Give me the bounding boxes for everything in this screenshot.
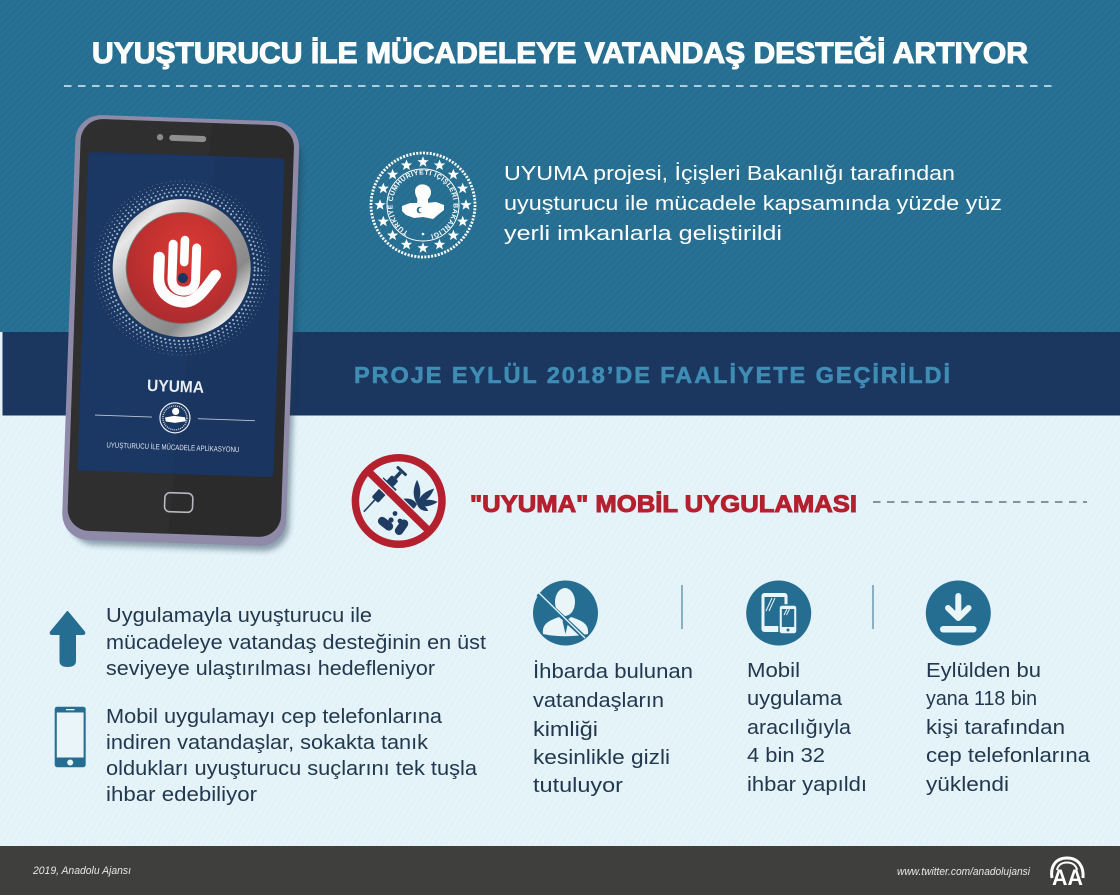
text: downloads: yana 118 bin [926, 688, 1037, 710]
icon: ministry seal: TÜRKİYE CUMHURİYETİ İÇİŞLERİ BAKANLIĞI [388, 170, 459, 239]
intro text: uyuşturucu ile mücadele kapsamında yüzde yüz [504, 192, 1002, 215]
text: identity kept secret: İhbarda bulunan [533, 660, 693, 683]
text: reporting: oldukları uyuşturucu suçlarını tek tuşla [106, 758, 478, 780]
text: downloads: yüklendi [926, 774, 1009, 796]
text: downloads: cep telefonlarına [926, 745, 1091, 767]
band: project date [2, 332, 1120, 416]
footer [0, 846, 1120, 895]
footer credit: 2019, Anadolu Ajansı [32, 865, 131, 877]
text: number of reports: uygulama [747, 688, 843, 710]
footer url: www.twitter.com/anadolujansi [897, 866, 1031, 878]
icon: download [926, 580, 991, 646]
text: reporting: Mobil uygulamayı cep telefonlarına [106, 706, 443, 728]
icon: no drugs sign [355, 458, 442, 544]
text: downloads: kişi tarafından [926, 717, 1065, 739]
text: reporting: indiren vatandaşlar, sokakta tanık [106, 732, 429, 754]
intro text: yerli imkanlarla geliştirildi [504, 222, 782, 245]
text: number of reports: 4 bin 32 [747, 745, 825, 767]
icon: ministry seal [370, 152, 476, 258]
text: number of reports [747, 660, 867, 796]
text: downloads: Eylülden bu [926, 660, 1041, 682]
text: identity kept secret: kesinlikle gizli [533, 747, 670, 769]
text: number of reports: ihbar yapıldı [747, 774, 867, 796]
text: goal: seviyeye ulaştırılması hedefleniyor [106, 658, 435, 680]
title: UYUŞTURUCU İLE MÜCADELEYE VATANDAŞ DESTEĞİ ARTIYOR [92, 36, 1028, 70]
text: downloads [926, 660, 1091, 796]
text: identity kept secret: vatandaşların [533, 690, 664, 712]
logo: Anadolu Agency: AA [1052, 865, 1083, 890]
icon: up arrow [51, 612, 84, 666]
header panel: blue background [0, 0, 1120, 332]
phone screen [77, 152, 284, 477]
intro text: UYUMA projesi, İçişleri Bakanlığı tarafından [504, 162, 955, 185]
text: number of reports: Mobil [747, 660, 800, 682]
section heading: "UYUMA" MOBİL UYGULAMASI [470, 491, 857, 518]
text: goal: Uygulamayla uyuşturucu ile [106, 605, 372, 627]
app subtitle: UYUŞTURUCU İLE MÜCADELE APLİKASYONU [106, 440, 240, 454]
phone camera [157, 134, 163, 140]
icon: anonymous person [533, 580, 598, 646]
text: goal [106, 605, 486, 680]
phone illustration [61, 114, 303, 552]
text: reporting [106, 706, 478, 806]
text: identity kept secret: kimliği [533, 719, 598, 741]
intro text [504, 162, 1002, 245]
app name: UYUMA [147, 377, 204, 397]
text: reporting: ihbar edebiliyor [106, 784, 257, 806]
text: number of reports: aracılığıyla [747, 717, 852, 739]
icon: tablet and phone [746, 580, 811, 646]
icon: stop hand [158, 239, 217, 303]
text: identity kept secret: tutuluyor [533, 775, 623, 797]
phone speaker [169, 135, 206, 142]
text: identity kept secret [533, 660, 693, 797]
app emblem [94, 400, 255, 436]
app button [92, 178, 272, 358]
band heading: PROJE EYLÜL 2018’DE FAALİYETE GEÇİRİLDİ [354, 362, 950, 388]
text: goal: mücadeleye vatandaş desteğinin en üst [106, 632, 486, 654]
phone body [61, 114, 300, 547]
phone home button [164, 493, 193, 513]
icon: mobile phone [55, 707, 86, 767]
